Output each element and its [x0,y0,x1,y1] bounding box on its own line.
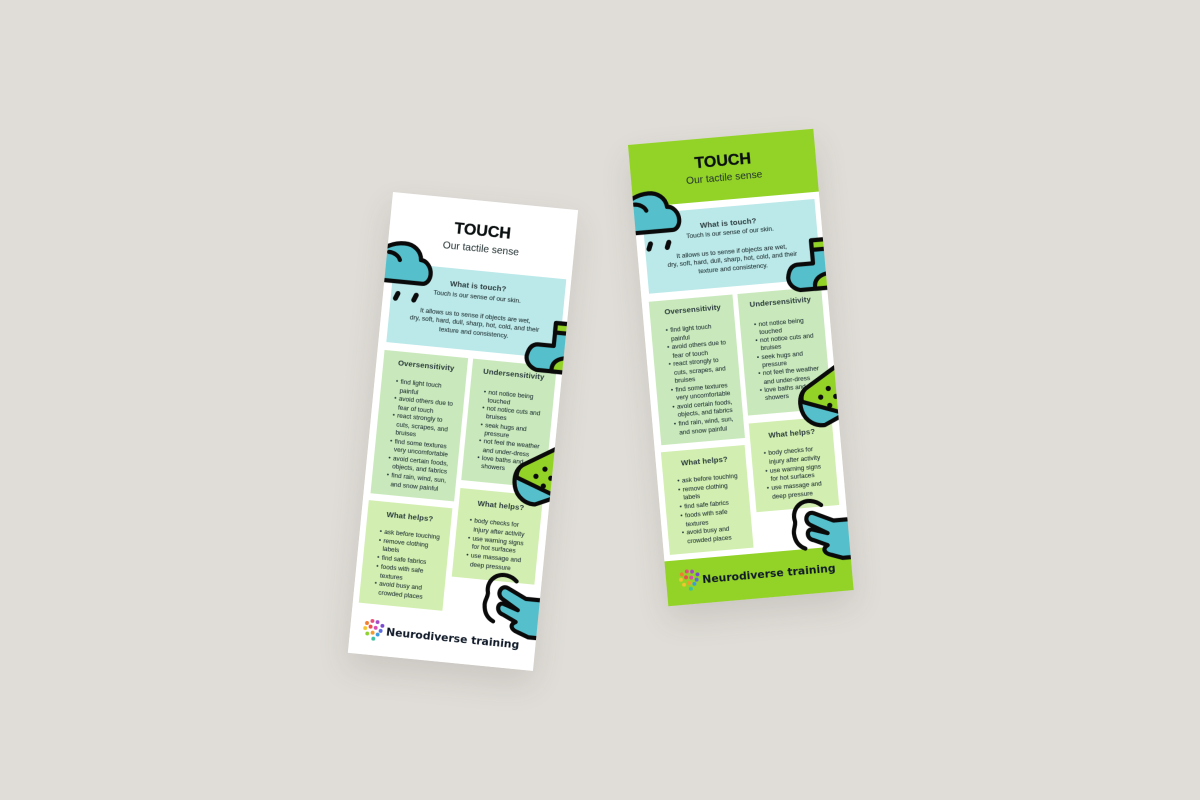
heading: what is touch: What is touch? [450,279,507,293]
icon: logo mark [362,618,385,642]
heading: what helps left: What helps? [681,454,728,467]
list: oversensitivity: very uncomfortable [676,390,731,402]
brand name: Neurodiverse training [386,625,520,651]
panel: what helps right [451,487,543,584]
list: oversensitivity: and snow painful [390,481,439,492]
panel: green bookmark card [628,129,854,606]
panel: what helps left [661,445,754,555]
list: what helps right: use massage and [771,481,822,492]
list: what helps right: use warning signs [472,535,524,547]
list: oversensitivity: avoid certain foods, [677,399,733,411]
list: oversensitivity: objects, and fabrics [677,407,733,419]
list: what helps right [764,446,822,501]
list: oversensitivity [666,323,734,436]
text block: definition: dry, soft, hard, dull, sharp, hot, cold, and their [409,314,539,334]
list: oversensitivity: fear of touch [398,404,434,415]
list: undersensitivity [754,317,819,402]
list: what helps right [466,518,525,572]
list: what helps left: foods with safe [685,509,728,519]
list: oversensitivity: react strongly to [397,413,443,424]
heading: what is touch: What is touch? [700,216,757,230]
list: undersensitivity: pressure [484,430,509,439]
icons: cloud, sock, capsule, hand and logo mark [632,190,851,591]
list: oversensitivity: react strongly to [673,357,719,368]
list: undersensitivity: not notice cuts and [760,333,814,344]
list: oversensitivity: avoid certain foods, [393,455,448,468]
title: TOUCH [454,220,512,243]
list: what helps right: use warning signs [770,463,821,474]
list: oversensitivity: bruises [674,376,696,385]
list: undersensitivity: seek hugs and [485,422,527,433]
list: oversensitivity: avoid others due to [672,339,726,351]
list: undersensitivity: bruises [760,344,782,353]
list: oversensitivity: cuts, scrapes, and [674,365,726,377]
heading: oversensitivity: Oversensitivity [664,303,721,316]
list: undersensitivity: showers [765,393,789,402]
list: what helps left: find safe fabrics [684,500,729,511]
text block: definition: It allows us to sense if objects are wet, [676,243,787,260]
icon: sock [785,239,832,291]
list: oversensitivity: find some textures [675,382,728,394]
brand name: Neurodiverse training [702,562,836,586]
heading: what helps right: What helps? [768,427,815,440]
list: oversensitivity: find rain, wind, sun, [391,472,446,485]
list: what helps right: injury after activity [769,454,820,466]
list: what helps left: labels [382,546,400,555]
panel: what is touch [386,262,566,359]
list: what helps left: remove clothing [682,482,728,493]
list: undersensitivity: not notice being [758,317,804,328]
list: oversensitivity: painful [399,387,419,396]
icon: rain cloud [625,191,682,251]
list: what helps left: textures [380,572,403,581]
list: oversensitivity: cuts, scrapes, and [396,421,448,433]
list: oversensitivity: avoid others due to [398,396,453,408]
list: oversensitivity: and snow painful [679,425,727,436]
icon: logo mark [678,568,701,592]
list: undersensitivity: pressure [762,360,787,369]
heading: what helps left: What helps? [386,509,434,523]
list: undersensitivity: love baths and [764,383,806,394]
list: what helps right: body checks for [768,446,813,457]
text block: definition: dry, soft, hard, dull, sharp, hot, cold, and their [667,251,797,269]
list: what helps right: use massage and [471,553,521,564]
text block: definition [667,226,797,275]
header band [628,129,819,208]
list: what helps left: avoid busy and [379,581,422,592]
panel: oversensitivity [371,350,468,501]
list: undersensitivity: touched [759,327,782,336]
list: undersensitivity: bruises [486,414,507,423]
list: oversensitivity: painful [671,334,690,343]
heading: undersensitivity: Undersensitivity [483,367,545,382]
panel: what helps right [748,416,839,512]
list: what helps left: find safe fabrics [381,555,427,566]
text block: definition: texture and consistency. [698,262,768,275]
list: undersensitivity: and under-dress [482,447,529,458]
icons: cloud, sock, capsule, hand and logo mark [363,240,568,641]
title: TOUCH [694,150,752,172]
text block: definition: texture and consistency. [439,326,509,340]
list: what helps left [677,473,738,545]
text block: definition [409,289,540,340]
icon: capsule [797,363,845,427]
list: undersensitivity: not feel the weather [483,438,540,451]
panel: undersensitivity [737,287,832,416]
text block: definition: Touch is our sense of our skin. [686,226,774,240]
list: oversensitivity [386,379,453,492]
list: undersensitivity [478,389,541,472]
panel: oversensitivity [649,294,745,445]
list: what helps left: textures [685,519,709,528]
list: oversensitivity: find light touch [670,323,712,334]
list: undersensitivity: not notice being [488,389,534,400]
list: undersensitivity: seek hugs and [761,350,803,361]
list: what helps right: body checks for [474,518,519,529]
list: what helps left: crowded places [687,534,732,545]
panel: what is touch [642,199,821,294]
list: what helps right: deep pressure [772,490,813,501]
icon: sock [525,320,573,373]
panel: undersensitivity [461,359,557,488]
list: undersensitivity: and under-dress [763,375,810,386]
text block: definition: Touch is our sense of our skin. [433,289,521,305]
subtitle: Our tactile sense [442,240,519,259]
list: what helps right: for hot surfaces [770,472,815,483]
list: oversensitivity: fear of touch [672,349,708,360]
list: undersensitivity: touched [487,397,511,406]
icon: touching hand [482,573,548,639]
subtitle: Our tactile sense [686,169,763,187]
list: what helps left: ask before touching [682,473,738,485]
list: undersensitivity: love baths and [482,455,524,466]
list: oversensitivity: objects, and fabrics [392,464,447,476]
list: what helps left: foods with safe [381,563,424,575]
shadow: green card [628,129,854,606]
list: what helps left: remove clothing [383,537,429,549]
footer band [664,545,854,607]
icon: capsule [512,442,561,506]
heading: what helps right: What helps? [477,499,525,512]
list: what helps left [374,529,440,601]
text block: definition: It allows us to sense if objects are wet, [420,307,531,325]
list: what helps right: deep pressure [470,561,511,572]
list: what helps left: ask before touching [384,529,440,541]
icon: rain cloud [377,241,433,301]
list: undersensitivity: not notice cuts and [486,405,541,418]
shadow: white card [348,192,578,671]
heading: undersensitivity: Undersensitivity [749,295,811,309]
list: undersensitivity: showers [481,463,505,472]
panel: what helps left [359,500,452,611]
list: oversensitivity: find some textures [394,438,447,450]
heading: oversensitivity: Oversensitivity [398,358,455,373]
panel: white bookmark card [348,192,578,671]
list: oversensitivity: find rain, wind, sun, [678,416,734,428]
list: oversensitivity: very uncomfortable [393,447,448,459]
list: what helps left: avoid busy and [686,526,730,537]
list: what helps left: crowded places [378,589,423,601]
list: what helps left: labels [683,493,700,502]
list: undersensitivity: not feel the weather [763,366,819,377]
list: oversensitivity: find light touch [400,379,442,390]
list: what helps right: injury after activity [473,526,525,538]
list: oversensitivity: bruises [395,430,416,439]
icon: touching hand [791,497,857,562]
list: what helps right: for hot surfaces [471,544,516,555]
